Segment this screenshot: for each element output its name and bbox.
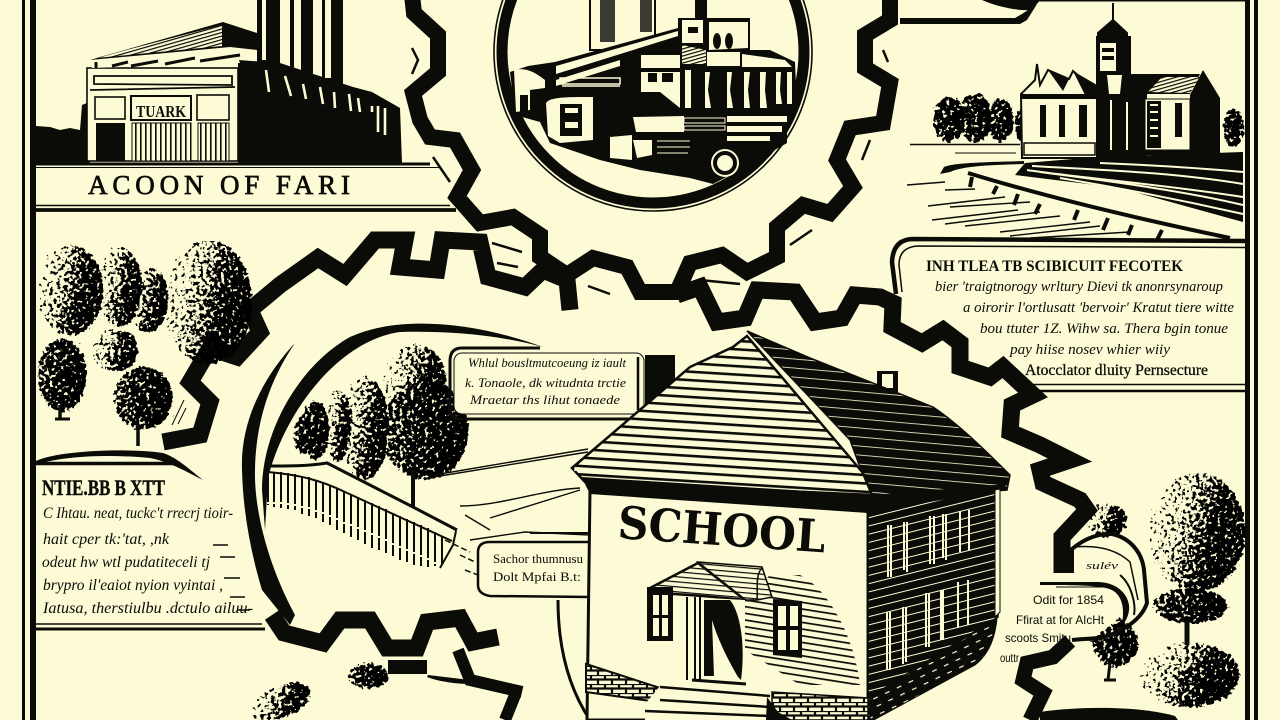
factory complex xyxy=(510,18,797,184)
church xyxy=(1021,3,1220,158)
callout: lower speech bubble: Dolt Mpfai B.t: xyxy=(493,570,581,584)
panel: school house xyxy=(572,331,1010,720)
twin towers xyxy=(590,0,707,50)
eave band xyxy=(582,477,1007,513)
panel frame xyxy=(892,239,1245,294)
chimney right xyxy=(877,371,898,397)
factory building front xyxy=(87,22,257,161)
icon: smokestacks xyxy=(257,0,343,85)
lower gear bottom teeth xyxy=(272,615,498,648)
stone plinth right xyxy=(772,692,868,720)
shaded side wall xyxy=(868,485,1000,720)
dark stones xyxy=(347,663,389,689)
front roof xyxy=(572,336,872,495)
panel: church top right xyxy=(900,0,1244,240)
callout: upper speech bubble xyxy=(450,348,644,419)
icon: trees behind church xyxy=(932,93,1244,148)
stippled bush xyxy=(252,682,311,720)
panel: right text block xyxy=(892,239,1245,391)
dark roof slope xyxy=(747,331,1010,500)
ploughed field xyxy=(1015,152,1243,222)
road lines xyxy=(440,449,590,540)
callout: upper speech bubble: Mraetar ths lihut tonaede xyxy=(469,392,620,407)
lower right gear remains xyxy=(1023,641,1070,720)
left window xyxy=(647,587,673,641)
gear tooth scratches xyxy=(412,48,888,294)
lower gear left sweep xyxy=(242,343,295,625)
foundation side xyxy=(870,618,997,720)
rules around caption xyxy=(36,162,430,166)
right body text: bou ttuter 1Z. Wihw sa. Thera bgin tonue xyxy=(980,321,1228,337)
vignette arc xyxy=(262,324,543,530)
thin arc near school xyxy=(558,600,590,720)
panel: lower gear outline xyxy=(163,240,1087,720)
gear lower arm xyxy=(458,650,522,692)
entry steps xyxy=(645,686,772,720)
left body text xyxy=(42,505,253,617)
callout: upper speech bubble: k. Tonaole, dk witudnta trctie xyxy=(465,375,626,390)
icon: tree group left xyxy=(36,239,253,446)
gear foot xyxy=(505,695,515,720)
gear block xyxy=(388,660,470,684)
callout: right speech bubble: Ffirat at for AIcHt xyxy=(1016,613,1105,627)
callout: right speech bubble: scoots Smitu xyxy=(1005,631,1071,645)
wall siding hatch xyxy=(745,575,860,685)
school door xyxy=(687,597,746,684)
panel: left text block xyxy=(36,450,265,629)
left body text: hait cper tk:'tat, ,nk xyxy=(43,531,170,548)
callout: right speech bubble: sulév xyxy=(1086,560,1118,572)
panel: factory medallion xyxy=(494,0,812,211)
callout: right speech bubble: outtr xyxy=(1000,651,1019,665)
callout: right speech bubble xyxy=(1000,534,1178,720)
field furrows xyxy=(907,182,1130,238)
text arch xyxy=(36,450,203,480)
callout: lower speech bubble xyxy=(478,533,590,597)
door shrub xyxy=(766,697,792,720)
chimney left xyxy=(645,355,675,410)
caption: ACOON OF FARI xyxy=(88,170,350,200)
right heading: INH TLEA TB SCIBICUIT FECOTEK xyxy=(926,258,1184,275)
fence slope xyxy=(268,463,457,568)
porch roof xyxy=(652,562,772,600)
sign text: TUARK xyxy=(136,102,187,121)
school label: SCHOOL xyxy=(616,496,827,563)
left body text: brypro il'eaiot nyion vyintai , xyxy=(43,577,223,594)
callout: right speech bubble: Odit for 1854 xyxy=(1033,593,1104,607)
fence rail xyxy=(968,173,1230,240)
winding road xyxy=(940,161,1024,174)
right body text: a oirorir l'ortlusatt 'bervoir' Kratut tiere witte xyxy=(963,300,1234,316)
panel: landscape vignette xyxy=(262,324,590,575)
banner swoosh xyxy=(900,0,1041,24)
callout: lower speech bubble: Sachor thumnusu xyxy=(493,552,584,566)
callout: upper speech bubble: Whlul bousltmutcoeung iz iault xyxy=(468,355,626,370)
gear slope hatch xyxy=(172,400,186,425)
ground silhouette left xyxy=(36,103,90,163)
left heading: NTIE.BB B XTT xyxy=(42,475,165,500)
right window xyxy=(773,599,802,658)
factory black hall xyxy=(238,60,402,163)
vignette trees xyxy=(293,344,469,506)
left body text: odeut hw wtl pudatiteceli tj xyxy=(42,554,211,571)
factory hall window slits xyxy=(266,70,385,135)
left body text: C Ihtau. neat, tuckc't rrecrj tioir- xyxy=(43,505,233,522)
right body text: pay hiise nosev whier wiiy xyxy=(1009,342,1170,358)
left body text: Iatusa, therstiulbu .dctulo ailuu- xyxy=(42,600,253,617)
icon: tree group right xyxy=(1086,472,1246,708)
panel: factory top left xyxy=(36,0,456,210)
stone plinth left xyxy=(586,664,660,702)
right body text xyxy=(935,279,1234,358)
right body text: bier 'traigtnorogy wrltury Dievi tk anonrsynaroup xyxy=(935,279,1223,295)
panel: upper gear xyxy=(412,0,890,294)
front wall xyxy=(587,490,868,720)
right footer text: Atocclator dluity Pernsecture xyxy=(1025,362,1208,379)
